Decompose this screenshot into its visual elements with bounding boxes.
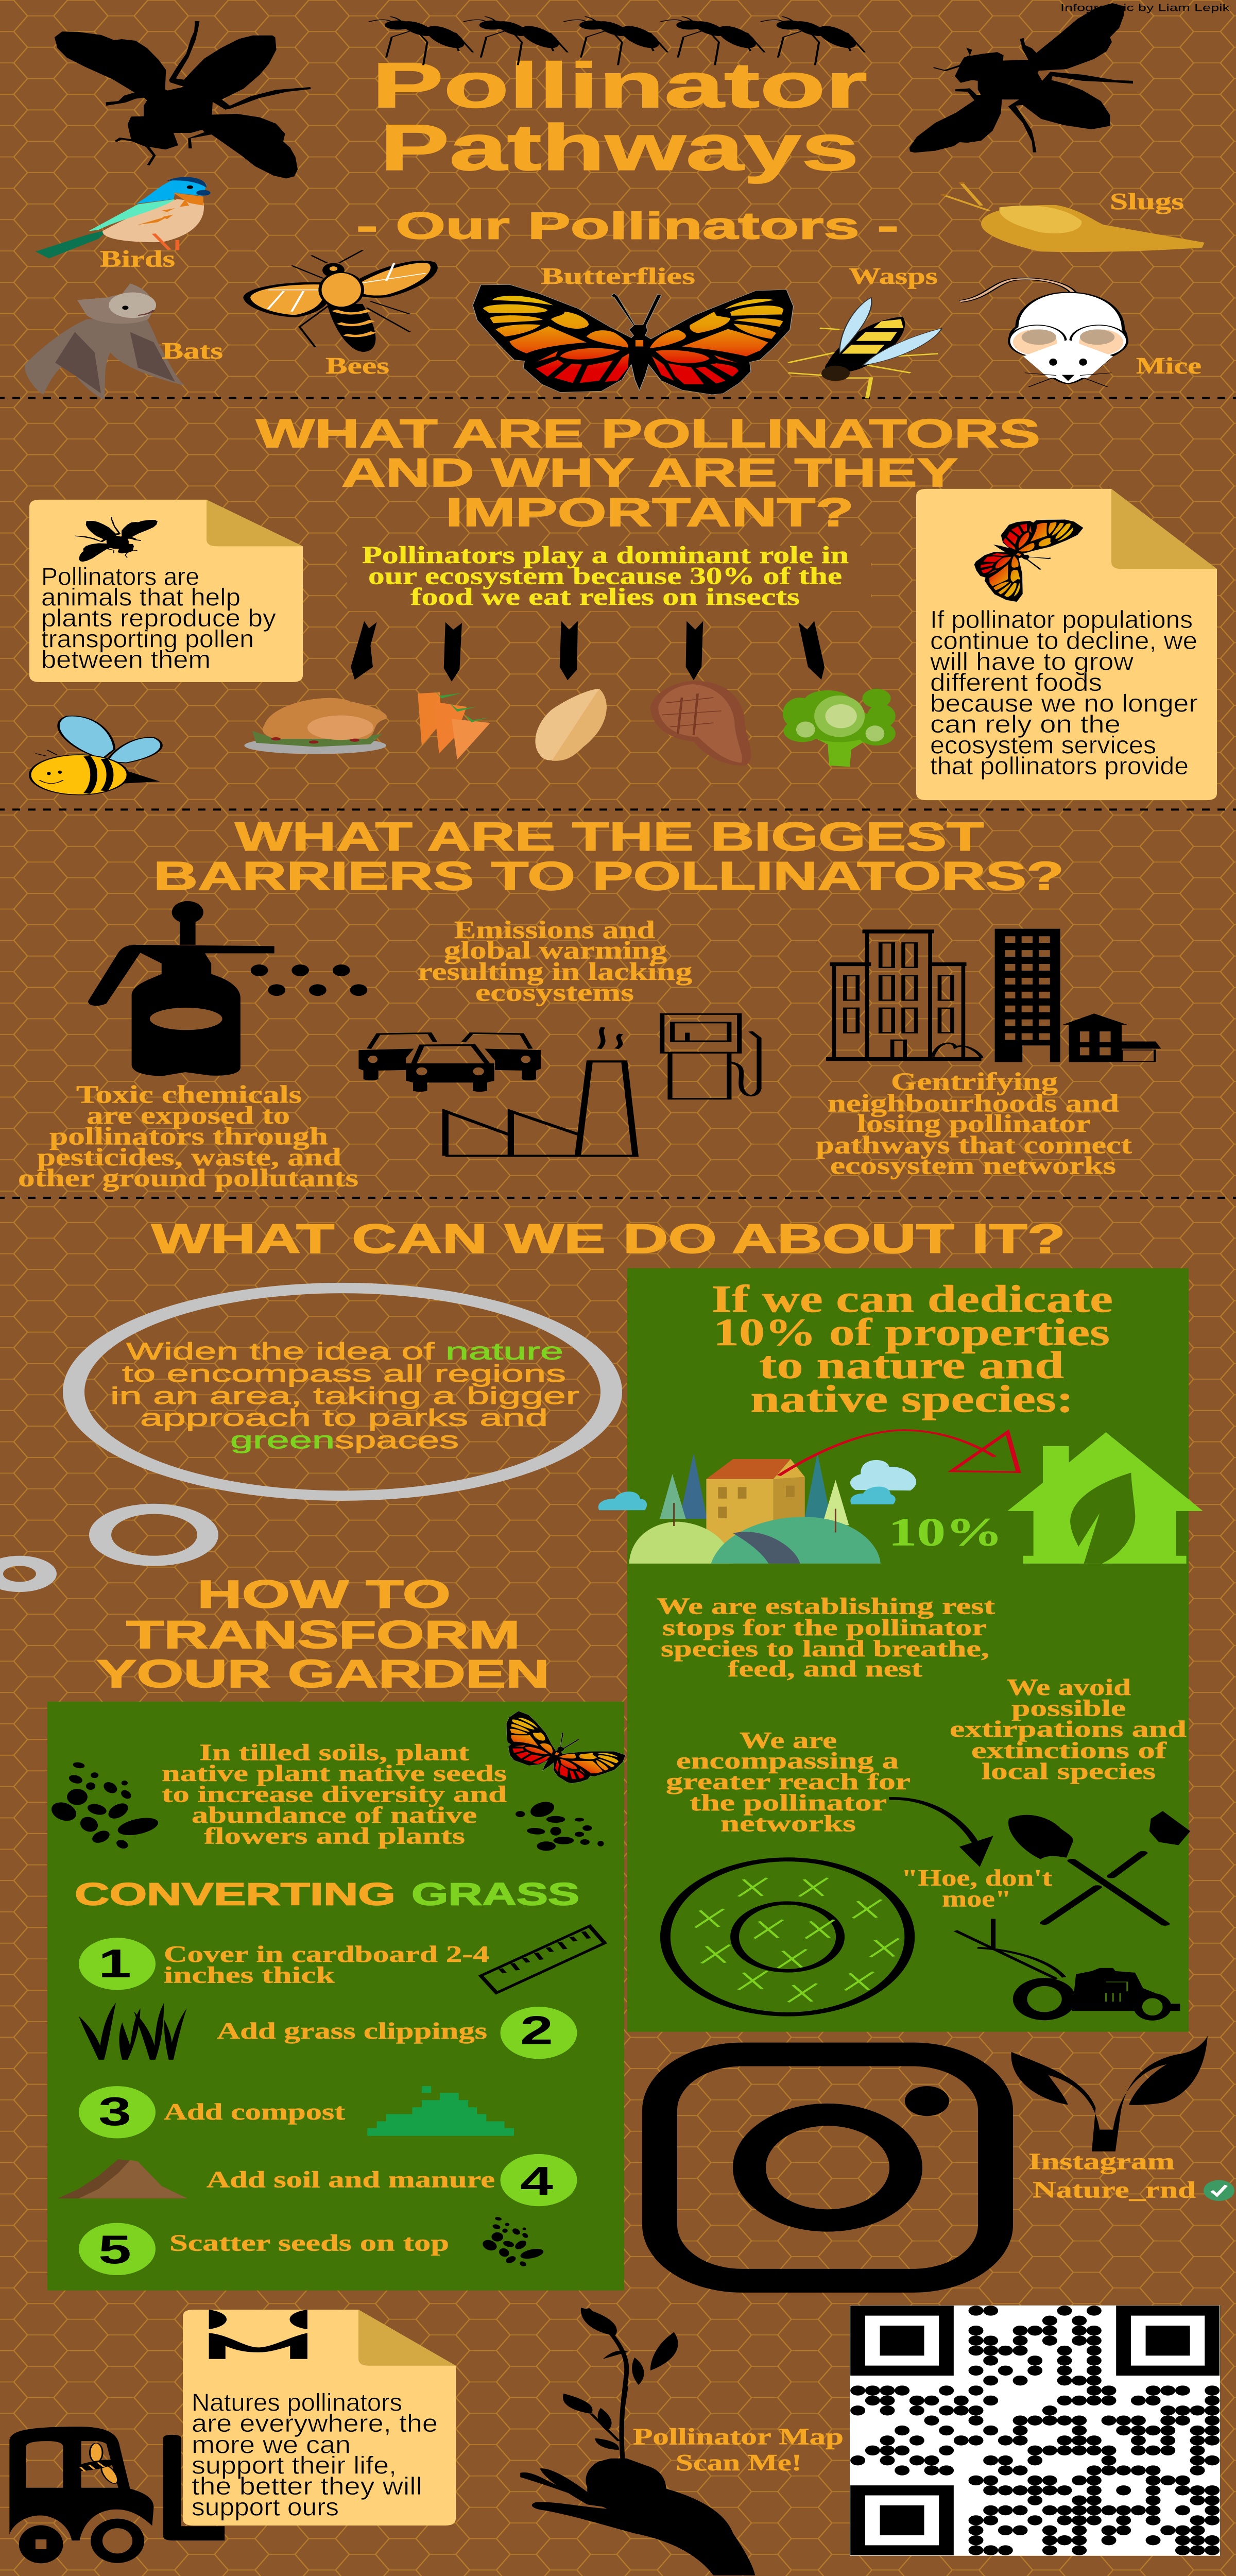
icon: tower block (995, 929, 1060, 1062)
icon: turkey (244, 698, 387, 754)
text: dominant role statement (362, 541, 849, 610)
icon: row of ants (369, 16, 865, 65)
text: emissions (418, 916, 692, 1007)
text: in tilled soils: native plant native seeds (162, 1760, 507, 1786)
icon: large butterfly (473, 284, 794, 395)
icon: left bee silhouette (55, 21, 311, 178)
icon: green house with leaf (1007, 1432, 1203, 1564)
text: hoe dont moe: moe" (942, 1885, 1011, 1912)
text: avoid extirpations: We avoid (1007, 1674, 1131, 1700)
step 1: inches thick (164, 1961, 335, 1988)
text: what pollinators are: animals that help (41, 583, 241, 611)
icon: bee (247, 250, 434, 352)
text: widen the idea of nature: green (230, 1427, 335, 1453)
text: gentrifying: Gentrifying (891, 1068, 1058, 1096)
text: dedicate 10 percent: to nature and (759, 1344, 1064, 1387)
heading: biggest barriers (153, 814, 1064, 898)
icon: compost pile (367, 2086, 514, 2136)
icon: planted ring garden (665, 1859, 909, 2014)
icon: apartment buildings (826, 929, 982, 1061)
step 4 (207, 2154, 577, 2206)
text: widen the idea of nature: to encompass all regions (122, 1361, 566, 1387)
icon: verified check (1204, 2180, 1234, 2201)
arrow: curved black arrow (889, 1799, 993, 1867)
text: in tilled soils (162, 1739, 507, 1849)
label: slugs: Slugs (1110, 188, 1184, 214)
label: bats: Bats (162, 337, 223, 364)
icon: bird (36, 177, 211, 259)
step 1: 1 (98, 1941, 131, 1986)
text: emissions: resulting in lacking (418, 958, 692, 986)
step 2 (217, 2007, 577, 2059)
label: mice: Mice (1136, 352, 1201, 379)
step 5: Scatter seeds on top (169, 2230, 449, 2256)
text: gentrifying: losing pollinator (857, 1110, 1091, 1138)
text: dominant role statement: our ecosystem because 30% of the (368, 562, 842, 589)
text: rest stops: species to land breathe, (661, 1635, 989, 1662)
text: emissions: Emissions and (454, 916, 655, 944)
icon: cars (358, 1033, 541, 1092)
text: instagram handle (1028, 2148, 1196, 2203)
icon: wasp (788, 297, 942, 398)
credit line: Infographic by Liam Lepik (1060, 3, 1230, 13)
text: hoe dont moe: "Hoe, don't (901, 1865, 1053, 1891)
icon: bat (25, 283, 185, 400)
text: gentrifying: pathways that connect (816, 1131, 1132, 1159)
step 2: 2 (520, 2008, 553, 2053)
icon: gas pump (662, 1014, 759, 1099)
text: natures pollinators: Natures pollinators (192, 2388, 402, 2416)
icon: QR code (850, 2306, 1220, 2556)
text: toxic chemicals (18, 1081, 358, 1192)
text: rest stops (657, 1592, 995, 1682)
heading: converting grass (75, 1877, 579, 1912)
text: gentrifying: neighbourhoods and (828, 1090, 1119, 1117)
panel: right green panel (627, 1268, 1189, 2032)
icon: broccoli (783, 689, 896, 767)
text: natures pollinators: the better they will (192, 2472, 422, 2500)
text: if populations decline: can rely on the (930, 710, 1121, 738)
text: dedicate 10 percent: 10% of properties (713, 1311, 1110, 1353)
arrow: red arrow to house (779, 1430, 1019, 1476)
text: in tilled soils: abundance of native (192, 1802, 477, 1828)
text: rest stops: stops for the pollinator (662, 1614, 987, 1640)
label: birds: Birds (100, 246, 175, 272)
panel: left green panel (47, 1702, 624, 2291)
text: widen the idea of nature: nature (445, 1338, 563, 1365)
title (372, 50, 867, 184)
text: emissions: global warming (444, 937, 667, 964)
text: natures pollinators: support ours (192, 2493, 339, 2521)
text: avoid extirpations: local species (982, 1758, 1156, 1784)
step 1: Cover in cardboard 2-4 (164, 1941, 489, 1967)
icon: butterfly on green panel (482, 1710, 629, 1793)
text: widen the idea of nature (110, 1338, 579, 1453)
text: encompassing reach (666, 1727, 911, 1837)
icon: potato (535, 689, 607, 761)
step 3 (79, 2086, 346, 2138)
heading: how to transform your garden (96, 1572, 550, 1696)
text: dedicate 10 percent: If we can dedicate (711, 1277, 1113, 1320)
icon: spray bottle (88, 901, 367, 1076)
icon: lawn mower (955, 1919, 1180, 2021)
step 5: 5 (98, 2227, 131, 2272)
text: widen the idea of nature: spaces (335, 1427, 459, 1453)
text: encompassing reach: greater reach for (666, 1768, 911, 1795)
text: natures pollinators: are everywhere, the (192, 2410, 438, 2437)
heading: how to transform your garden: TRANSFORM (126, 1613, 520, 1656)
text: if populations decline: will have to grow (930, 648, 1134, 675)
icon: soil pile (58, 2159, 187, 2198)
heading: our pollinators: - Our Pollinators - (356, 205, 899, 247)
text: avoid extirpations: extinctions of (971, 1737, 1167, 1764)
icon: sprout logo (1011, 2036, 1208, 2151)
text: in tilled soils: In tilled soils, plant (199, 1739, 470, 1766)
icon: mouse (960, 279, 1127, 387)
icon: clouds (598, 1460, 916, 1510)
text: instagram handle: Instagram (1028, 2148, 1175, 2175)
text: avoid extirpations: possible (1011, 1694, 1126, 1721)
text: natures pollinators: more we can (192, 2431, 351, 2459)
text: encompassing reach: networks (720, 1810, 856, 1837)
text: gentrifying: ecosystem networks (830, 1152, 1116, 1179)
heading: biggest barriers: WHAT ARE THE BIGGEST (235, 814, 984, 859)
text: what pollinators are: between them (41, 646, 211, 673)
panel: right note (916, 489, 1217, 800)
text: gentrifying (816, 1068, 1132, 1179)
heading: what are pollinators (256, 411, 1040, 535)
text: toxic chemicals: Toxic chemicals (76, 1081, 302, 1109)
icon: ruler (481, 1926, 605, 1993)
text: toxic chemicals: pollinators through (49, 1123, 328, 1150)
text: widen the idea of nature: Widen the idea of (126, 1338, 445, 1365)
text: dedicate 10 percent (711, 1277, 1113, 1420)
heading: how to transform your garden: YOUR GARDEN (96, 1652, 550, 1696)
heading: converting grass: GRASS (411, 1877, 579, 1912)
icon: bee in cab (67, 2443, 122, 2484)
icon: village landscape (629, 1453, 881, 1564)
text: dominant role statement: food we eat relies on insects (410, 583, 800, 610)
heading: what are pollinators: AND WHY ARE THEY (341, 450, 958, 495)
icon: forklift (9, 2427, 225, 2563)
icon: crossed garden tools (1008, 1811, 1190, 1924)
text: avoid extirpations: extirpations and (950, 1716, 1187, 1742)
title: Pollinator (372, 50, 867, 121)
text: toxic chemicals: are exposed to (87, 1101, 290, 1129)
icon: small house (1062, 1013, 1161, 1062)
icon: factory (445, 1027, 636, 1156)
icon: cartoon bee (30, 716, 162, 795)
heading: biggest barriers: BARRIERS TO POLLINATORS? (153, 853, 1064, 898)
text: emissions: ecosystems (475, 979, 634, 1007)
text: dedicate 10 percent: native species: (750, 1377, 1074, 1420)
icon: scattered seeds (481, 2217, 548, 2266)
text: encompassing reach: encompassing a (676, 1748, 899, 1774)
panel: bottom note (183, 2310, 456, 2526)
panel: left note (29, 500, 303, 682)
icon: carrots (418, 689, 490, 759)
text: pollinator map (633, 2423, 844, 2476)
label: bees: Bees (325, 352, 389, 379)
icon: steak (650, 681, 751, 766)
icon: stingers pointing at foods (351, 621, 825, 682)
text: encompassing reach: the pollinator (690, 1789, 887, 1816)
text: toxic chemicals: other ground pollutants (18, 1164, 358, 1192)
icon: small bee silhouette (75, 517, 158, 562)
heading: what are pollinators: WHAT ARE POLLINATORS (256, 411, 1040, 455)
text: instagram handle: Nature_rnd (1033, 2176, 1196, 2203)
text: in tilled soils: flowers and plants (204, 1822, 465, 1849)
icon: right bee silhouette (909, 3, 1133, 152)
step 1 (79, 1938, 489, 1990)
text: rest stops: feed, and nest (728, 1655, 923, 1682)
step 4: 4 (520, 2158, 553, 2204)
text: toxic chemicals: pesticides, waste, and (37, 1143, 341, 1171)
text: pollinator map: Scan Me! (676, 2449, 802, 2476)
text: 10 percent: 10% (888, 1510, 1003, 1554)
icon: thought bubble (0, 1283, 622, 1592)
text: avoid extirpations (950, 1674, 1187, 1784)
heading: how to transform your garden: HOW TO (197, 1572, 451, 1616)
icon: grass (79, 2003, 187, 2060)
text: what pollinators are: plants reproduce by (41, 604, 277, 632)
label: wasps: Wasps (849, 263, 938, 289)
text: widen the idea of nature: in an area, taking a bigger (110, 1383, 579, 1409)
text: what pollinators are: transporting pollen (41, 625, 254, 653)
step 5 (79, 2223, 449, 2275)
heading: what are pollinators: IMPORTANT? (445, 490, 854, 535)
icon: small butterfly (959, 503, 1085, 605)
text: natures pollinators: support their life, (192, 2451, 397, 2479)
heading: converting grass: CONVERTING (75, 1877, 396, 1912)
icon: seeds left (48, 1761, 166, 1849)
step 2: Add grass clippings (217, 2018, 487, 2044)
step 3: Add compost (164, 2098, 346, 2125)
text: widen the idea of nature: approach to parks and (140, 1404, 548, 1431)
step 3: 3 (98, 2089, 131, 2133)
icon: slug (940, 182, 1205, 252)
text: hoe dont moe (901, 1865, 1053, 1912)
text: what pollinators are: Pollinators are (41, 563, 199, 590)
text: pollinator map: Pollinator Map (633, 2423, 844, 2450)
text: in tilled soils: to increase diversity and (162, 1781, 507, 1807)
label: butterflies: Butterflies (541, 263, 695, 289)
icon: hand holding plant (520, 2308, 755, 2575)
text: if populations decline (930, 606, 1198, 779)
text: what pollinators are (41, 563, 277, 673)
title: Pathways (380, 111, 859, 184)
icon: smile logo (209, 2310, 307, 2359)
text: if populations decline: different foods (930, 668, 1102, 696)
step 4: Add soil and manure (207, 2166, 495, 2193)
icon: instagram logo (660, 2055, 995, 2281)
icon: seeds right (516, 1801, 604, 1851)
text: dominant role statement: Pollinators play a dominant role in (362, 541, 849, 568)
heading: what can we do: WHAT CAN WE DO ABOUT IT? (151, 1216, 1066, 1262)
text: encompassing reach: We are (740, 1727, 837, 1753)
text: rest stops: We are establishing rest (657, 1592, 995, 1619)
text: natures pollinators (192, 2388, 438, 2521)
